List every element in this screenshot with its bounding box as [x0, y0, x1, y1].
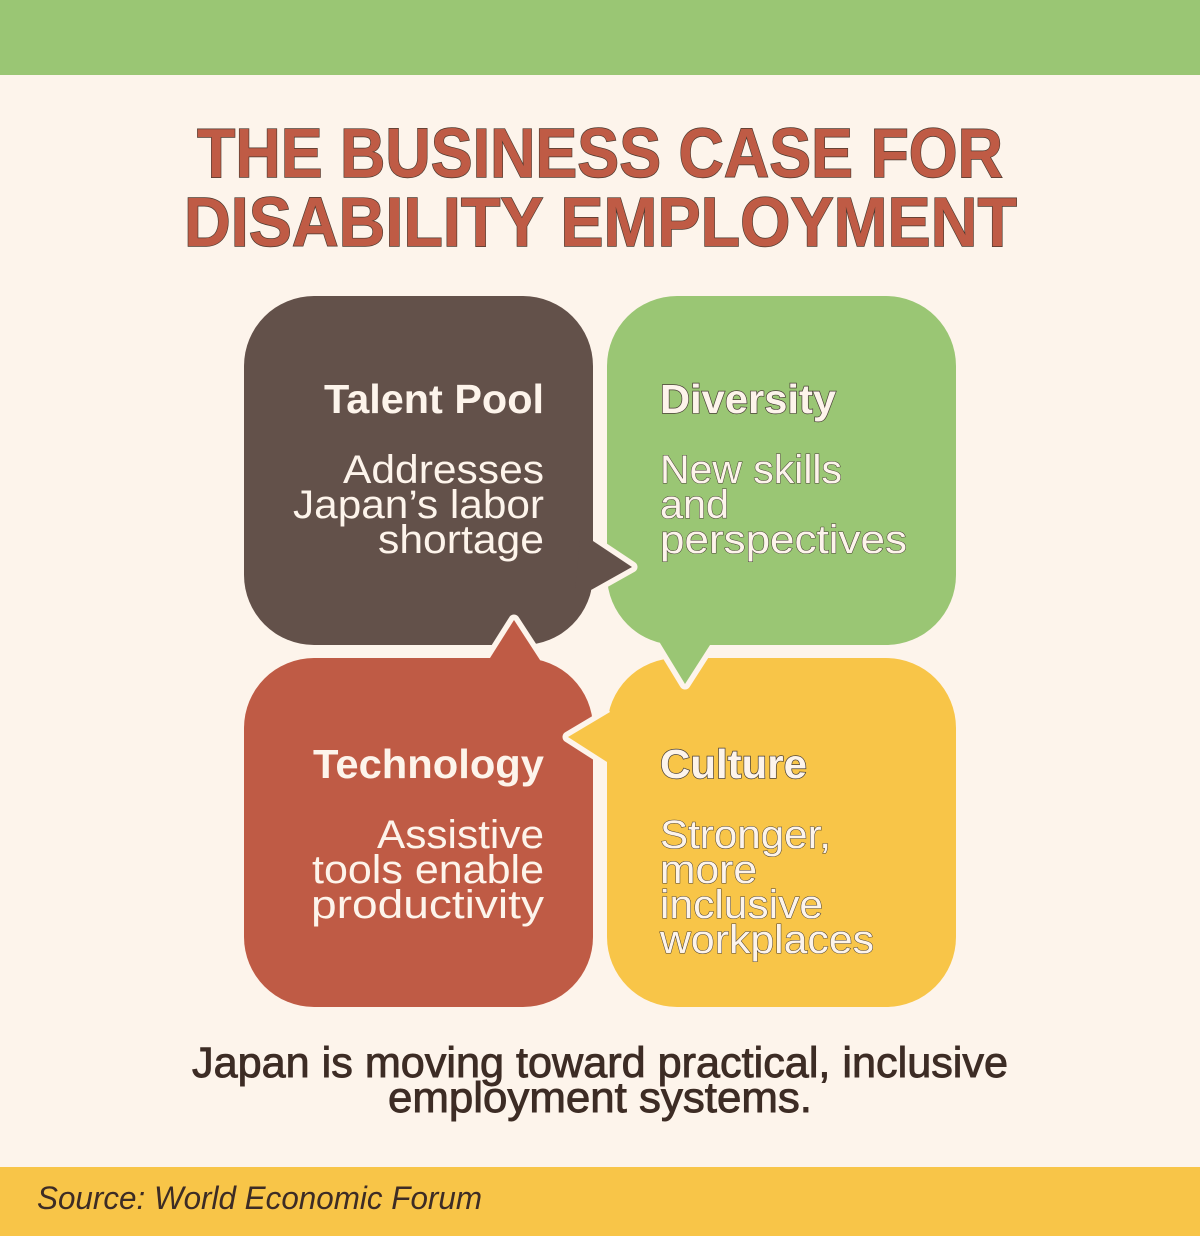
panel: diversity bubble — [607, 296, 956, 645]
text block: culture: workplaces — [659, 918, 874, 962]
bottom yellow source banner — [0, 1167, 1200, 1236]
arrow: talent pool tail — [575, 541, 632, 590]
text block: culture — [659, 741, 874, 962]
arrow: culture tail — [568, 706, 625, 762]
text block: diversity: New skills — [660, 448, 842, 492]
title: THE BUSINESS CASE FOR — [197, 114, 1003, 192]
title: DISABILITY EMPLOYMENT — [184, 183, 1017, 261]
text block: talent pool: Talent Pool — [324, 376, 544, 422]
title — [184, 114, 1017, 261]
text block: diversity: Diversity — [660, 376, 836, 422]
text block: technology: Assistive — [377, 813, 544, 857]
arrow: technology tail — [490, 620, 540, 675]
text block: culture: Culture — [660, 741, 807, 787]
text block: technology: productivity — [311, 883, 544, 927]
source note: Source: World Economic Forum — [37, 1180, 482, 1216]
panel: talent pool bubble — [244, 296, 593, 645]
text block: culture: more — [660, 848, 757, 892]
arrow: diversity tail — [660, 630, 710, 684]
text block: technology: tools enable — [312, 848, 544, 892]
top green banner — [0, 0, 1200, 75]
panel: culture bubble — [607, 658, 956, 1007]
text block: talent pool: Addresses — [343, 448, 544, 492]
text block: technology: Technology — [313, 741, 544, 787]
text block: culture: Stronger, — [660, 813, 831, 857]
text block: diversity: and — [660, 483, 729, 527]
closing statement — [192, 1039, 1008, 1122]
text block: talent pool: Japan’s labor — [293, 483, 544, 527]
speech bubble diagram — [244, 296, 956, 1007]
text block: diversity — [660, 376, 907, 562]
closing statement: Japan is moving toward practical, inclusive — [192, 1039, 1008, 1087]
closing statement: employment systems. — [388, 1074, 812, 1122]
text block: talent pool — [293, 376, 544, 562]
text block: diversity: perspectives — [660, 518, 907, 562]
text block: culture: inclusive — [660, 883, 823, 927]
text block: talent pool: shortage — [378, 518, 544, 562]
text block: technology — [311, 741, 544, 927]
panel: technology bubble — [244, 658, 593, 1007]
